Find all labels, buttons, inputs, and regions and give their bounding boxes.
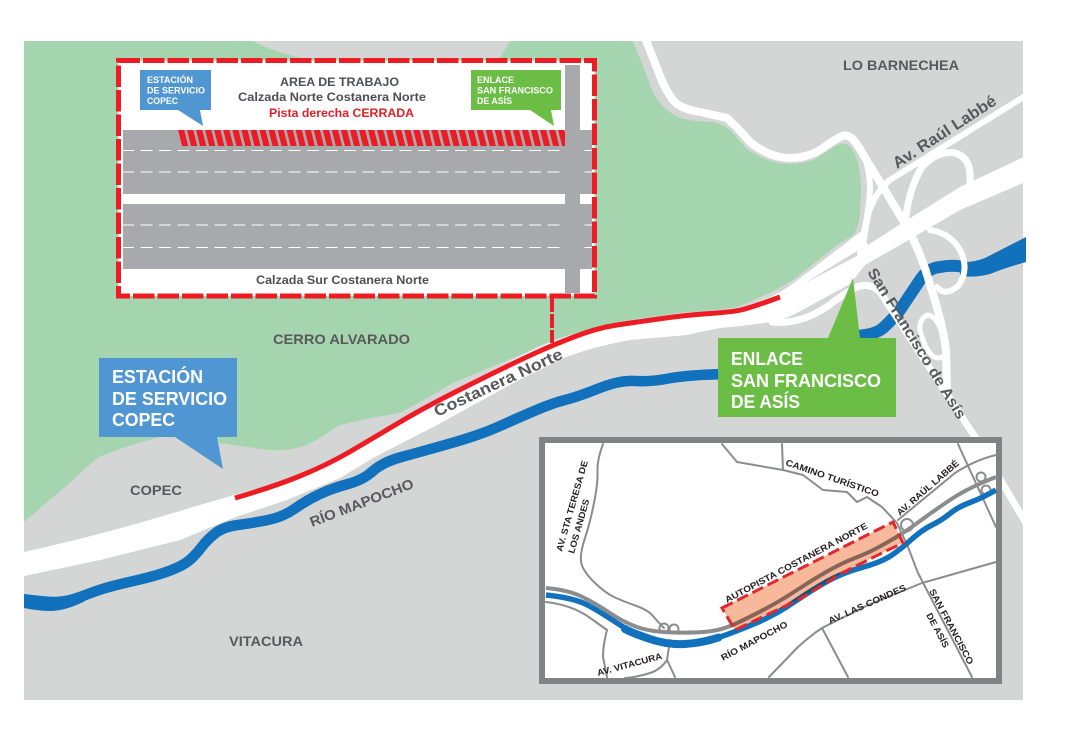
subheading: north carriageway: Calzada Norte Costanera Norte <box>238 92 426 104</box>
callout: Enlace San Francisco de Asís: DE ASÍS <box>731 391 800 412</box>
roadway: north carriageway <box>123 130 592 194</box>
callout: Estación de Servicio Copec: DE SERVICIO <box>112 389 227 409</box>
inset label: Av. Raúl Labbé: AV. RAÚL LABBÉ <box>894 457 961 518</box>
small callout: Enlace San Francisco de Asís: SAN FRANCISCO <box>477 86 553 96</box>
small callout: Enlace San Francisco de Asís: ENLACE <box>477 75 514 85</box>
inset: locator map <box>542 440 999 681</box>
inset label: Av. Vitacura: AV. VITACURA <box>596 651 664 678</box>
inset: work zone dashed outline <box>722 522 903 630</box>
inset: river <box>546 490 996 644</box>
roadway: south carriageway <box>123 204 592 269</box>
callout: Enlace San Francisco de Asís: ENLACE <box>731 349 803 369</box>
label: Copec: COPEC <box>130 482 182 498</box>
inset label: Los Andes: LOS ANDES <box>566 498 591 555</box>
inset label: Río Mapocho: RÍO MAPOCHO <box>719 619 789 663</box>
callout: Estación de Servicio Copec <box>99 358 237 469</box>
small callout: Enlace San Francisco de Asís: DE ASÍS <box>477 96 512 106</box>
panel dashed border <box>118 60 594 296</box>
inset: highlighted work zone <box>722 522 903 630</box>
label: Vitacura: VITACURA <box>229 633 303 649</box>
road: small lower loop <box>920 315 946 358</box>
label: Av. Raúl Labbé: Av. Raúl Labbé <box>890 93 1000 172</box>
status: right lane closed: Pista derecha CERRADA <box>269 108 414 120</box>
small callout: Estación de Servicio Copec: COPEC <box>147 96 178 106</box>
label: Río Mapocho: RÍO MAPOCHO <box>307 475 416 530</box>
road: Av. Raúl Labbé <box>865 94 1023 242</box>
road: San Francisco de Asís <box>772 285 1030 530</box>
small callout: Estación de Servicio Copec: ESTACIÓN <box>147 74 193 85</box>
inset label: De Asís: DE ASÍS <box>924 611 951 649</box>
map: cerro green area <box>24 41 861 522</box>
small callout: Estación de Servicio Copec <box>140 70 211 126</box>
road gap: sliver between ramps <box>803 251 857 284</box>
small callout: Estación de Servicio Copec: DE SERVICIO <box>147 86 205 96</box>
label: south carriageway: Calzada Sur Costanera Norte <box>256 275 429 287</box>
label: Cerro Alvarado: CERRO ALVARADO <box>273 331 410 347</box>
road: upper-left access road <box>645 38 947 392</box>
small callout: Enlace San Francisco de Asís <box>471 70 561 126</box>
road: edge road beside the hill <box>860 145 873 234</box>
closed lane hatching <box>178 130 565 146</box>
inset: road network <box>546 444 996 678</box>
callout: Enlace San Francisco de Asís <box>718 278 896 417</box>
roadway: cross street <box>565 65 580 293</box>
callout: Estación de Servicio Copec: ESTACIÓN <box>112 366 203 387</box>
label: Costanera Norte: Costanera Norte <box>432 346 566 421</box>
callout: Enlace San Francisco de Asís: SAN FRANCISCO <box>731 371 881 391</box>
callout: Estación de Servicio Copec: COPEC <box>112 410 175 430</box>
connector from panel to work zone <box>550 298 554 343</box>
inset: Costanera Norte highway <box>546 477 996 633</box>
inset label: Av. Las Condes: AV. LAS CONDES <box>827 583 908 626</box>
road: lower loop <box>930 230 965 292</box>
river: Río Mapocho <box>24 237 1026 611</box>
panel: work area detail <box>118 60 594 296</box>
label: Lo Barnechea: LO BARNECHEA <box>843 57 959 73</box>
inset label: Av. Sta Teresa de: AV. STA TERESA DE <box>554 459 590 553</box>
inset label: San Francisco: SAN FRANCISCO <box>927 587 975 666</box>
inset label: Camino Turístico: CAMINO TURÍSTICO <box>784 457 880 499</box>
road: Costanera Norte <box>24 154 1030 576</box>
label: San Francisco de Asís: San Francisco de Asís <box>864 265 969 422</box>
inset label: Autopista Costanera Norte: AUTOPISTA COSTANERA NORTE <box>723 521 869 605</box>
heading: work area: AREA DE TRABAJO <box>280 75 399 89</box>
work zone: red line on Costanera Norte <box>235 297 780 498</box>
road: upper loop <box>905 153 970 225</box>
lane markings <box>122 150 592 248</box>
